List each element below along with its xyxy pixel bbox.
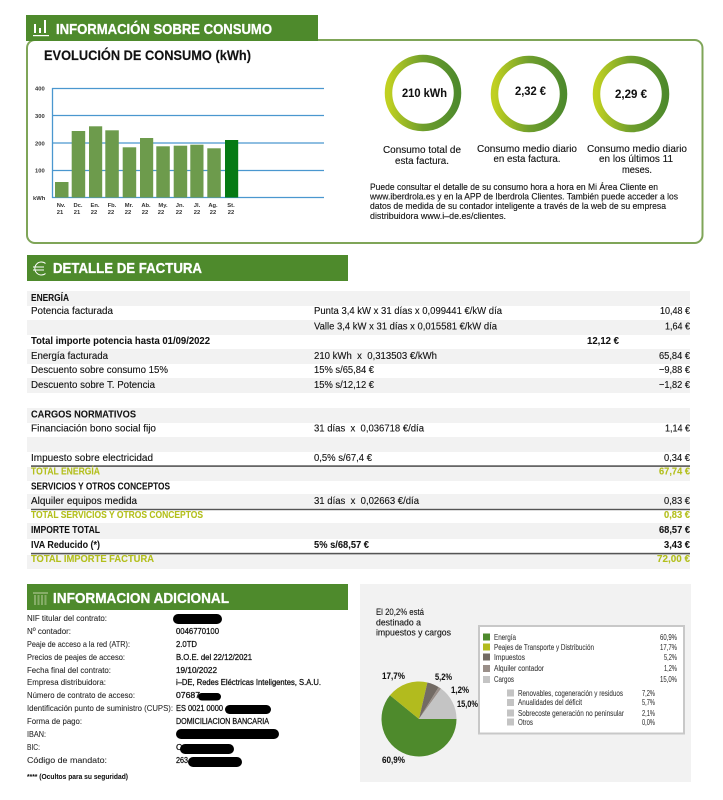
text block: contract labels: Identificación punto de suministro (CUPS): (27, 703, 173, 713)
bar chart: monthly consumption: 22 (228, 210, 234, 216)
bar chart: monthly consumption: 300 (35, 114, 45, 120)
stat: consumo total (383, 58, 461, 167)
section: importe total: 68,57 € (659, 525, 690, 536)
bar chart: monthly consumption: Nv. (57, 203, 66, 209)
bar chart: monthly consumption: Mr. (125, 203, 134, 209)
bar chart: monthly consumption: Ab. (141, 203, 151, 209)
stat: consumo total: Consumo total de (383, 145, 461, 156)
legend: Anualidades del déficit (518, 698, 583, 707)
legend: 1,2% (664, 664, 677, 673)
section: cargos normativos: 0,34 € (664, 453, 690, 464)
legend: 2,1% (642, 709, 655, 718)
footnote: **** (Ocultos para su seguridad) (27, 772, 128, 781)
text block: contract labels: Peaje de acceso a la red (ATR): (27, 639, 130, 649)
pie chart: 15,0% (457, 698, 479, 709)
section: energía: ENERGÍA (31, 291, 69, 304)
section: energía: 1,64 € (665, 322, 690, 332)
section: cargos normativos: 1,14 € (665, 424, 690, 434)
stat: consumo medio 11 meses: Consumo medio diario (587, 144, 687, 155)
section: energía: 12,12 € (587, 336, 619, 347)
section: energía: 65,84 € (659, 351, 690, 362)
section: energía: 15% s/12,12 € (314, 380, 374, 391)
stat: consumo medio 11 meses (587, 60, 687, 176)
section: servicios y otros conceptos (31, 482, 690, 521)
section: cargos normativos: Impuesto sobre electricidad (31, 453, 153, 464)
text block: contract values: ES 0021 0000 (176, 703, 223, 713)
legend: 15,0% (660, 675, 677, 684)
bar chart: monthly consumption: 100 (35, 168, 45, 174)
section: energía: Descuento sobre T. Potencia (31, 380, 155, 391)
text block: breakdown headline (376, 607, 451, 638)
text block: contract labels: Código de mandato: (27, 755, 107, 765)
section: energía: Potencia facturada (31, 306, 113, 317)
legend: 60,9% (660, 633, 677, 642)
stat: consumo medio factura: 2,32 € (515, 86, 547, 98)
section: importe total (31, 525, 690, 565)
pie chart: 60,9% (382, 754, 406, 765)
stat: consumo medio factura: en esta factura. (494, 154, 560, 165)
bar chart: monthly consumption: 22 (176, 210, 182, 216)
text block: contract labels: Fecha final del contrato: (27, 665, 111, 675)
stat: consumo total: 210 kWh (402, 88, 447, 100)
stat: consumo medio factura: Consumo medio diario (477, 144, 577, 155)
stat: consumo total: esta factura. (395, 156, 449, 167)
table: invoice detail (27, 291, 690, 569)
section: importe total: IVA Reducido (*) (31, 540, 100, 551)
section: cargos normativos: CARGOS NORMATIVOS (31, 410, 136, 420)
text block: contract labels: Precios de peajes de acceso: (27, 652, 125, 662)
section: importe total: 72,00 € (657, 554, 690, 565)
icon: bar chart (33, 20, 49, 36)
bar chart: monthly consumption: En. (90, 203, 100, 209)
text block: contract labels: BIC: (27, 742, 40, 752)
text block: contract values: 19/10/2022 (176, 665, 217, 675)
text block: consumption note (369, 182, 678, 221)
bar chart: monthly consumption: 21 (74, 210, 81, 216)
bar chart: monthly consumption: 400 (35, 86, 45, 92)
text block: contract labels: Empresa distribuidora: (27, 677, 106, 687)
section: energía: −9,88 € (659, 365, 690, 376)
section: cargos normativos: 67,74 € (659, 466, 690, 478)
section: energía: 15% s/65,84 € (314, 365, 374, 376)
legend: Renovables, cogeneración y residuos (518, 689, 623, 698)
section: energía: 10,48 € (660, 306, 690, 317)
stat: consumo medio 11 meses: 2,29 € (615, 89, 648, 101)
heading: detalle de factura (27, 255, 348, 281)
heading: información adicional (27, 584, 348, 610)
text block: consumption note: Puede consultar el detalle de su consumo hora a hora en Mi Área Cliente en (370, 182, 658, 192)
redactions (173, 614, 279, 767)
text block: contract values: 0046770100 (176, 626, 219, 636)
legend: 0,0% (642, 718, 655, 727)
bar chart: monthly consumption: 22 (194, 210, 200, 216)
legend: Energía (494, 633, 516, 642)
text block: breakdown headline: impuestos y cargos (376, 628, 451, 638)
pie chart: 1,2% (451, 684, 470, 695)
bar chart: monthly consumption: 22 (91, 210, 97, 216)
bar chart: monthly consumption: Dc. (73, 203, 83, 209)
text block: consumption note: datos de medida de su contador inteligente a través de la web de su empresa (370, 201, 666, 211)
legend: Cargos (494, 675, 514, 684)
section: servicios y otros conceptos: SERVICIOS Y OTROS CONCEPTOS (31, 482, 170, 492)
bar chart: monthly consumption: 200 (35, 142, 45, 148)
legend: Sobrecoste generación no peninsular (518, 709, 624, 718)
text block: contract values: 07687 (176, 690, 200, 700)
bar chart: monthly consumption: 22 (125, 210, 131, 216)
legend (479, 626, 684, 734)
section: energía: 210 kWh x 0,313503 €/kWh (314, 351, 437, 362)
text block: contract labels: IBAN: (27, 729, 46, 739)
heading: información adicional: INFORMACION ADICIONAL (53, 591, 229, 607)
text block: contract labels: Número de contrato de acceso: (27, 690, 135, 700)
text block: consumption note: www.iberdrola.es y en la APP de Iberdrola Clientes. También puede acceder a los (369, 192, 678, 202)
bar chart: monthly consumption: 22 (142, 210, 148, 216)
section: importe total: IMPORTE TOTAL (31, 525, 101, 536)
bar chart: monthly consumption: Ag. (208, 203, 218, 209)
icon: building (33, 592, 48, 605)
section: cargos normativos: TOTAL ENERGÍA (31, 464, 100, 478)
bar chart: monthly consumption (33, 86, 324, 216)
section: servicios y otros conceptos: TOTAL SERVICIOS Y OTROS CONCEPTOS (31, 510, 203, 521)
text block: contract values: DOMICILIACION BANCARIA (176, 716, 269, 726)
heading: información sobre consumo (26, 15, 318, 41)
stat: consumo medio 11 meses: meses. (622, 165, 652, 176)
heading: detalle de factura: DETALLE DE FACTURA (53, 261, 202, 277)
legend: 5,2% (664, 653, 677, 662)
bar chart: monthly consumption: 22 (158, 210, 164, 216)
section: servicios y otros conceptos: Alquiler equipos medida (31, 496, 137, 507)
pie chart (381, 670, 479, 765)
legend: Impuestos (494, 653, 525, 662)
legend: 7,2% (642, 689, 655, 698)
section: cargos normativos: Financiación bono social fijo (31, 424, 156, 434)
stat: consumo medio factura (477, 60, 577, 165)
icon: euro (33, 262, 46, 275)
text block: contract labels: Forma de pago: (27, 716, 82, 726)
legend: Otros (518, 718, 533, 727)
panel: consumption (26, 15, 702, 243)
section: energía: Total importe potencia hasta 01/09/2022 (31, 336, 210, 347)
bar chart: monthly consumption: Jl. (194, 203, 201, 209)
bar chart: monthly consumption: 21 (57, 210, 64, 216)
text block: contract labels: Nº contador: (27, 626, 71, 636)
text block: contract labels (27, 613, 173, 765)
text block: contract values: C (176, 742, 182, 752)
chart title: EVOLUCIÓN DE CONSUMO (kWh) (44, 48, 251, 63)
text block: consumption note: distribuidora www.i–de.es/clientes. (370, 211, 506, 221)
text block: contract values: 2.0TD (176, 639, 197, 649)
bar chart: monthly consumption: My. (158, 203, 168, 209)
section: importe total: 5% s/68,57 € (314, 540, 369, 551)
text block: contract values: B.O.E. del 22/12/2021 (176, 652, 252, 662)
section: importe total: 3,43 € (664, 540, 690, 551)
bar chart: monthly consumption: St. (227, 203, 235, 209)
text block: contract labels: NIF titular del contrato: (27, 613, 107, 623)
bar chart: monthly consumption: Jn. (176, 203, 185, 209)
stat: consumo medio 11 meses: en los últimos 11 (599, 154, 673, 165)
section: servicios y otros conceptos: 0,83 € (664, 496, 690, 507)
bar chart: monthly consumption: kWh (33, 196, 46, 202)
section: servicios y otros conceptos: 0,83 € (664, 510, 690, 521)
heading: información sobre consumo: INFORMACIÓN SOBRE CONSUMO (56, 20, 272, 38)
section: energía: −1,82 € (659, 380, 690, 391)
section: energía (31, 291, 690, 391)
legend: Peajes de Transporte y Distribución (494, 643, 594, 652)
text block: breakdown headline: El 20,2% está (376, 607, 425, 617)
text block: contract values: 263 (176, 755, 188, 765)
pie chart: 17,7% (382, 670, 406, 681)
section: energía: Punta 3,4 kW x 31 días x 0,099441 €/kW día (314, 306, 502, 317)
text block: breakdown headline: destinado a (376, 618, 422, 628)
section: energía: Valle 3,4 kW x 31 días x 0,015581 €/kW día (314, 322, 497, 332)
bar chart: monthly consumption: 22 (108, 210, 114, 216)
legend: 17,7% (660, 643, 677, 652)
panel: cost breakdown (360, 584, 691, 782)
section: cargos normativos: 0,5% s/67,4 € (314, 453, 372, 464)
text block: contract values (176, 626, 321, 765)
section: energía: Descuento sobre consumo 15% (31, 365, 168, 376)
section: energía: Energía facturada (31, 351, 108, 362)
section: cargos normativos: 31 días x 0,036718 €/día (314, 424, 424, 434)
bar chart: monthly consumption: 22 (210, 210, 216, 216)
section: importe total: TOTAL IMPORTE FACTURA (31, 554, 154, 565)
legend: Alquiler contador (494, 664, 544, 673)
section: servicios y otros conceptos: 31 días x 0,02663 €/día (314, 496, 419, 507)
text block: contract values: i–DE, Redes Eléctricas Inteligentes, S.A.U. (176, 677, 321, 687)
pie chart: 5,2% (435, 671, 453, 682)
section: cargos normativos (31, 410, 690, 478)
legend: 5,7% (642, 698, 655, 707)
bar chart: monthly consumption: Fb. (108, 203, 117, 209)
